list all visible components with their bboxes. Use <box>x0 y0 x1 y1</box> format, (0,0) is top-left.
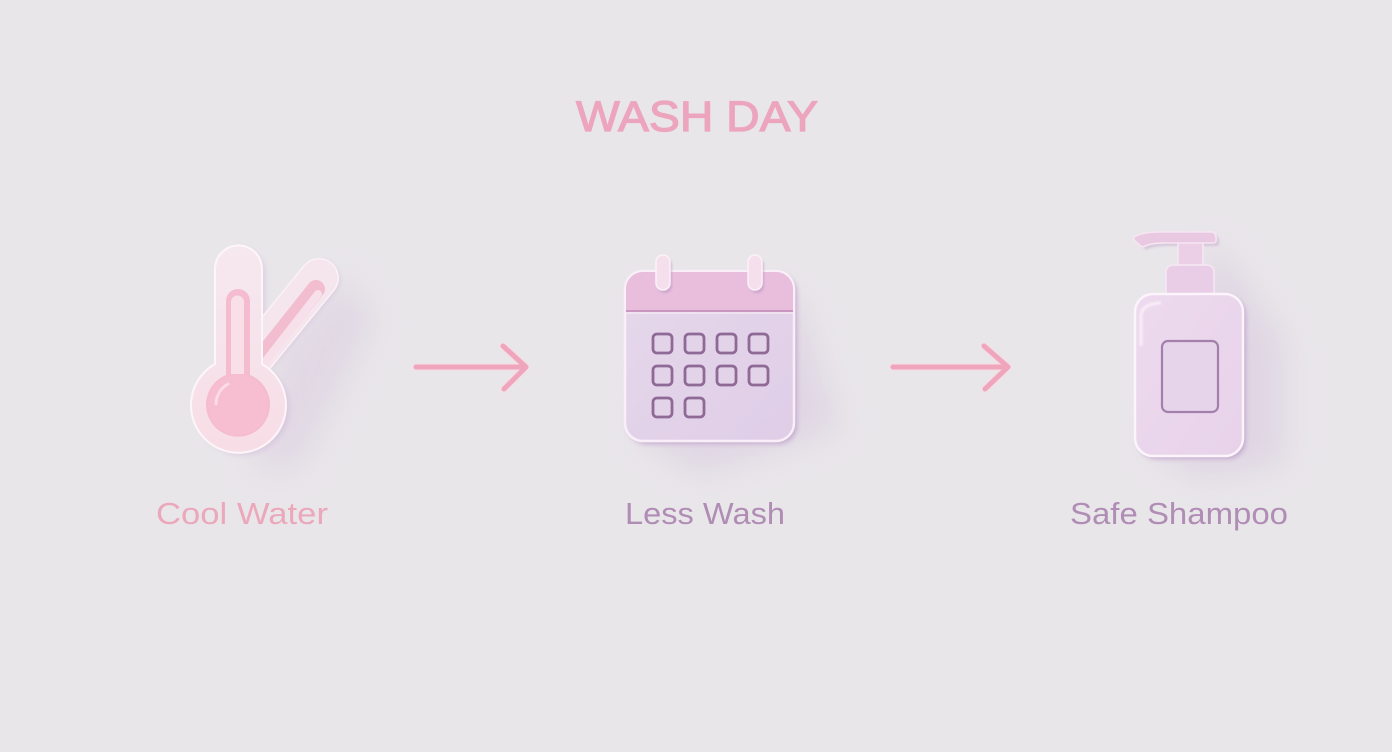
label: safe shampoo: Safe Shampoo <box>1070 496 1288 531</box>
calendar day grid <box>653 334 768 417</box>
calendar rings <box>656 255 764 293</box>
title: WASH DAY <box>576 93 818 141</box>
bottle label <box>1162 341 1218 412</box>
thermometer liquid <box>206 289 270 437</box>
pump head <box>1133 232 1216 247</box>
arrow: cool water to less wash <box>416 346 526 389</box>
pump stem <box>1178 241 1203 267</box>
main thermometer body <box>191 245 286 453</box>
label: less wash: Less Wash <box>625 496 785 531</box>
icon: calendar <box>625 255 840 475</box>
icon: thermometer <box>191 245 375 470</box>
pump collar <box>1166 265 1214 295</box>
icon: shampoo bottle <box>1133 232 1285 480</box>
second thermometer tube <box>243 278 319 376</box>
label: cool water: Cool Water <box>156 496 328 531</box>
arrow: less wash to safe shampoo <box>893 346 1008 389</box>
calendar header <box>626 272 793 311</box>
bottle body <box>1135 294 1243 456</box>
